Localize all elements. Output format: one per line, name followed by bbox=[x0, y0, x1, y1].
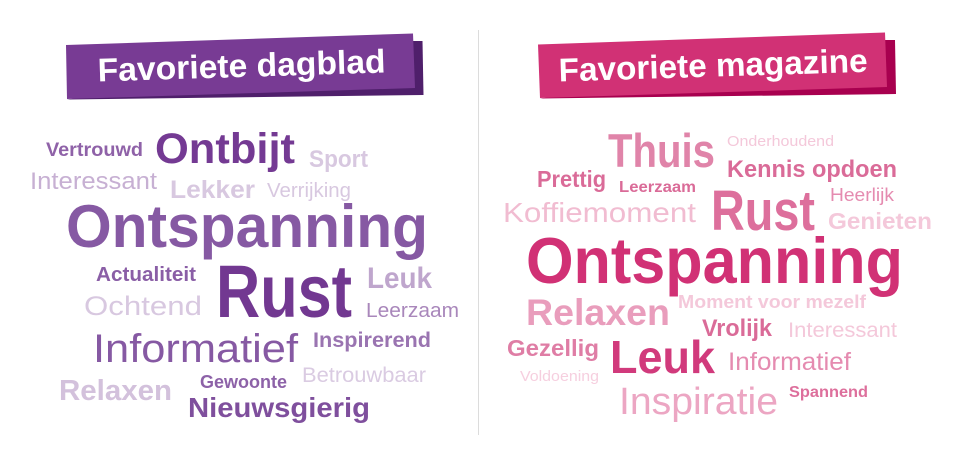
word: Koffiemoment: Koffiemoment bbox=[503, 197, 696, 228]
word: Moment voor mezelf: Moment voor mezelf bbox=[678, 292, 867, 312]
heading banner: favoriete magazine bbox=[538, 32, 896, 98]
word: Leerzaam: Leerzaam bbox=[619, 179, 696, 196]
word: Gezellig: Gezellig bbox=[507, 335, 599, 361]
word: Prettig: Prettig bbox=[537, 166, 606, 192]
panel: favoriete dagblad bbox=[30, 34, 459, 423]
word: Voldoening: Voldoening bbox=[520, 368, 599, 385]
heading banner: favoriete dagblad bbox=[66, 34, 424, 100]
word: Nieuwsgierig: Nieuwsgierig bbox=[188, 392, 370, 423]
word: Leerzaam: Leerzaam bbox=[366, 300, 459, 322]
heading banner: favoriete dagblad: Favoriete dagblad bbox=[97, 42, 386, 88]
word: Interessant: Interessant bbox=[788, 319, 897, 342]
word: Vrolijk: Vrolijk bbox=[702, 315, 773, 342]
panel: favoriete magazine bbox=[503, 32, 932, 423]
word: Heerlijk: Heerlijk bbox=[830, 185, 895, 205]
word: Relaxen: Relaxen bbox=[526, 292, 670, 333]
word: Sport: Sport bbox=[309, 146, 368, 173]
word: Vertrouwd: Vertrouwd bbox=[46, 140, 143, 161]
word cloud: magazine bbox=[503, 124, 932, 423]
word: Lekker: Lekker bbox=[170, 176, 255, 204]
word: Verrijking: Verrijking bbox=[267, 180, 351, 202]
word: Interessant: Interessant bbox=[30, 168, 157, 195]
word: Ontbijt: Ontbijt bbox=[155, 125, 295, 173]
word: Relaxen: Relaxen bbox=[59, 375, 172, 407]
word: Spannend: Spannend bbox=[789, 384, 868, 401]
word: Ochtend: Ochtend bbox=[84, 291, 202, 321]
word: Informatief: Informatief bbox=[93, 327, 299, 371]
word: Informatief: Informatief bbox=[728, 348, 851, 376]
word: Inspirerend: Inspirerend bbox=[313, 329, 431, 352]
word: Genieten: Genieten bbox=[828, 208, 932, 234]
word: Gewoonte: Gewoonte bbox=[200, 372, 287, 392]
word: Inspiratie: Inspiratie bbox=[619, 381, 778, 423]
word: Rust: Rust bbox=[711, 179, 815, 243]
word: Kennis opdoen: Kennis opdoen bbox=[727, 156, 897, 183]
word: Ontspanning: Ontspanning bbox=[526, 224, 903, 297]
heading banner: favoriete magazine: Favoriete magazine bbox=[558, 42, 868, 88]
word: Ontspanning: Ontspanning bbox=[66, 193, 428, 260]
word: Actualiteit: Actualiteit bbox=[96, 264, 196, 286]
word: Thuis: Thuis bbox=[608, 124, 715, 177]
word: Onderhoudend: Onderhoudend bbox=[727, 133, 834, 150]
word: Betrouwbaar: Betrouwbaar bbox=[302, 364, 426, 387]
word: Leuk: Leuk bbox=[367, 262, 432, 295]
word cloud: dagblad bbox=[30, 125, 459, 423]
word: Leuk: Leuk bbox=[610, 331, 715, 383]
word: Rust: Rust bbox=[216, 250, 352, 333]
